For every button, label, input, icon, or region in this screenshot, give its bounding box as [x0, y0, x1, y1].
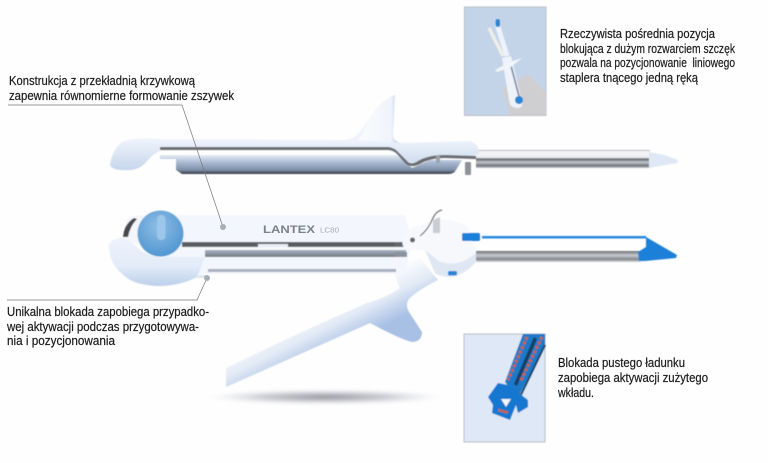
- jaw slot: [182, 242, 406, 257]
- pistol grip: [226, 258, 438, 387]
- callout: intermediate locking position: blokująca z dużym rozwarciem szczęk: [560, 42, 736, 56]
- callout: empty cartridge lockout text: wkładu.: [557, 386, 594, 400]
- lever curve: [420, 210, 442, 236]
- cartridge: [505, 334, 545, 398]
- right prong: [497, 24, 507, 56]
- leader line: safety lock: [7, 275, 210, 300]
- callout: intermediate locking position: Rzeczywista pośrednia pozycja: [560, 27, 715, 41]
- blue anvil line: [482, 236, 646, 238]
- head opening: [501, 399, 511, 407]
- cartridge dark edge: [520, 345, 545, 397]
- photo: empty cartridge lockout: [464, 334, 545, 442]
- brand label: LANTEX: [263, 224, 316, 236]
- callout: intermediate locking position: [560, 27, 736, 85]
- safety tab: [197, 275, 207, 278]
- leader line: cam gear: [8, 105, 226, 230]
- dial ridge: [157, 215, 166, 240]
- upper shaft tip: [649, 152, 678, 168]
- callout: empty cartridge lockout text: Blokada pustego ładunku: [558, 356, 685, 370]
- pin: [465, 162, 471, 175]
- callout: safety lock text: Unikalna blokada zapobiega przypadko-: [7, 305, 209, 319]
- jaw head: [402, 220, 477, 277]
- upper stapler, side view: [110, 95, 678, 175]
- stapler body: [502, 56, 522, 108]
- blue dial: [138, 210, 184, 256]
- callout: empty cartridge lockout text: zapobiega aktywacji zużytego: [558, 371, 708, 385]
- photo: one-handed positioning: [464, 7, 546, 116]
- cross lever: [495, 58, 522, 72]
- dial: [515, 96, 523, 104]
- lower grey slot: [208, 269, 396, 272]
- blue jaw tip: [496, 19, 500, 27]
- callout: safety lock text: [6, 305, 209, 348]
- lever fin: [433, 217, 440, 233]
- brand label: LC80: [320, 228, 339, 234]
- dark slot: [514, 337, 537, 386]
- callout: cam gear text: [9, 74, 235, 103]
- callout: intermediate locking position: staplera tnącego jedną ręką: [560, 71, 698, 85]
- main body: [125, 215, 412, 274]
- body dark inner: [510, 62, 520, 100]
- callout: cam gear text: Konstrukcja z przekładnią krzywkową: [9, 74, 195, 88]
- blue slider: [462, 233, 480, 241]
- lower stapler, open view: [109, 210, 677, 387]
- left prong: [489, 28, 503, 56]
- hand: [503, 74, 546, 115]
- metal rail: [160, 147, 476, 166]
- lower shaft: [476, 251, 641, 262]
- callout: empty cartridge lockout text: [557, 356, 708, 400]
- upper handle with fin: [110, 95, 479, 170]
- head staple: [498, 409, 508, 414]
- cartridge head: [488, 383, 528, 420]
- left stubs beside head: [395, 242, 407, 257]
- fin highlight: [358, 95, 402, 143]
- head blue button: [448, 271, 457, 276]
- staple rows: [508, 337, 527, 380]
- brand label: [263, 224, 339, 236]
- callout: safety lock text: wej aktywacji podczas przygotowywa-: [6, 320, 199, 334]
- blue tip: [638, 237, 677, 261]
- head shading: [425, 250, 477, 277]
- dark dial edge: [123, 218, 137, 237]
- rear grip: [109, 238, 205, 286]
- floor shadow: [205, 390, 445, 404]
- callout: safety lock text: nia i pozycjonowania: [7, 334, 115, 348]
- screw: [436, 155, 440, 163]
- callout: cam gear text: zapewnia równomierne formowanie zszywek: [9, 89, 235, 103]
- lower jaw: [160, 155, 462, 174]
- upper shaft: [476, 150, 650, 168]
- head pivot: [410, 238, 415, 242]
